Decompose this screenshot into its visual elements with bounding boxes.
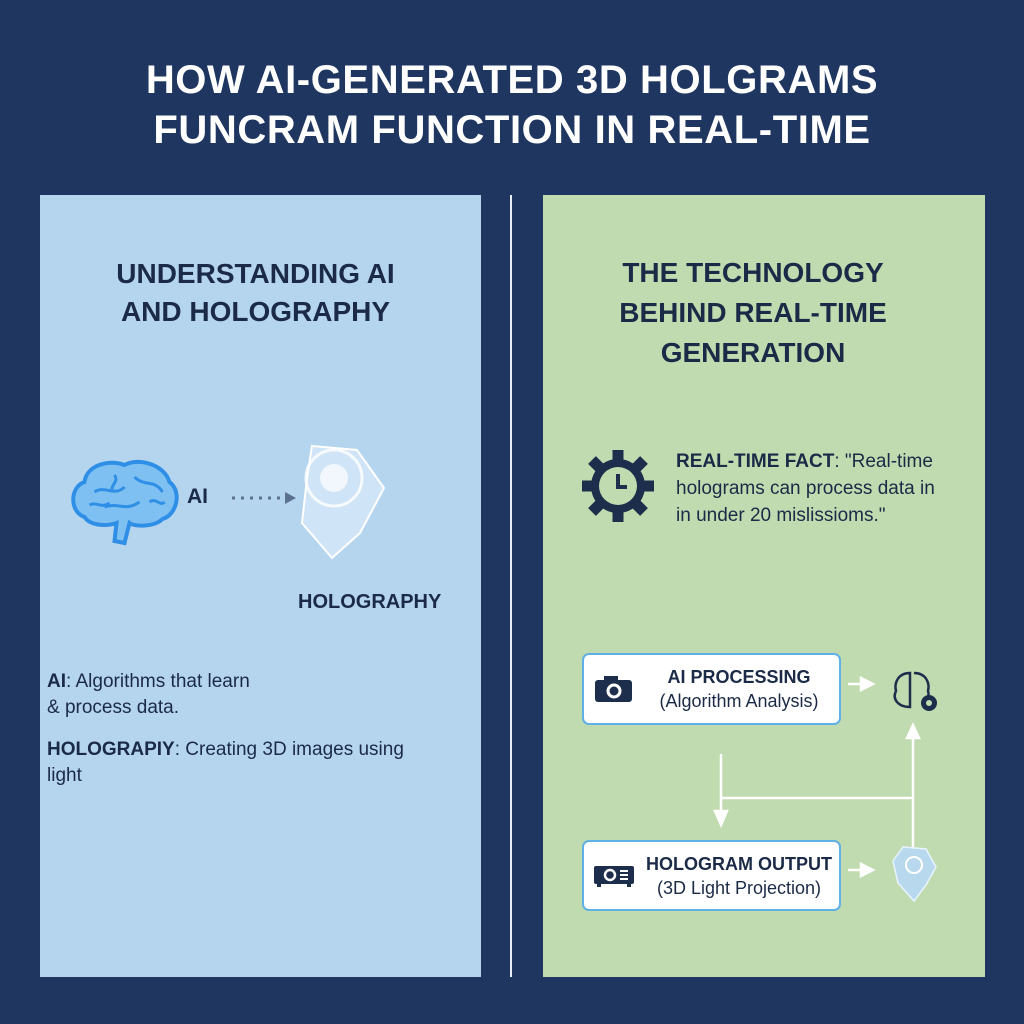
box: hologram output: (3D Light Projection) xyxy=(657,878,821,898)
heading left: AND HOLOGRAPHY xyxy=(121,296,390,327)
title xyxy=(146,58,878,152)
heading right: BEHIND REAL-TIME xyxy=(619,297,887,328)
text: AI definition: AI: Algorithms that learn xyxy=(47,671,250,692)
arrow dotted xyxy=(232,492,296,504)
text: AI definition: & process data. xyxy=(47,697,179,718)
label AI: AI xyxy=(187,485,208,508)
panel: understanding AI xyxy=(40,195,481,977)
icon: brain xyxy=(71,460,179,546)
text: real-time fact: in under 20 mislissioms." xyxy=(676,505,885,526)
box: AI processing: AI PROCESSING xyxy=(667,667,811,687)
label holography: HOLOGRAPHY xyxy=(298,591,441,613)
icon: camera xyxy=(595,676,632,702)
icon: brain gear xyxy=(893,672,937,711)
heading right: GENERATION xyxy=(661,337,845,368)
icon: projector xyxy=(594,866,634,887)
heading right xyxy=(619,257,887,368)
title: HOW AI-GENERATED 3D HOLGRAMS xyxy=(146,58,878,102)
title: FUNCRAM FUNCTION IN REAL-TIME xyxy=(153,108,871,152)
text: holography definition: HOLOGRAPIY: Creating 3D images using xyxy=(47,739,404,760)
text: holography definition xyxy=(47,739,404,786)
text: holography definition: light xyxy=(47,765,82,786)
arrows flow xyxy=(713,676,921,878)
box: hologram output xyxy=(582,840,841,911)
heading left xyxy=(116,258,395,327)
text: real-time fact: REAL-TIME FACT: "Real-time xyxy=(676,451,933,472)
icon: hologram small xyxy=(892,846,937,902)
heading right: THE TECHNOLOGY xyxy=(622,257,884,288)
box: hologram output: HOLOGRAM OUTPUT xyxy=(646,854,832,874)
heading left: UNDERSTANDING AI xyxy=(116,258,395,289)
icon: gear clock xyxy=(582,450,654,522)
box: AI processing: (Algorithm Analysis) xyxy=(659,691,819,711)
text: real-time fact: holograms can process data in xyxy=(676,478,935,499)
icon: hologram crystal xyxy=(301,444,386,560)
panel: technology xyxy=(543,195,985,977)
text: real-time fact xyxy=(676,451,935,526)
text: AI definition xyxy=(47,671,250,718)
box: AI processing xyxy=(582,653,841,725)
